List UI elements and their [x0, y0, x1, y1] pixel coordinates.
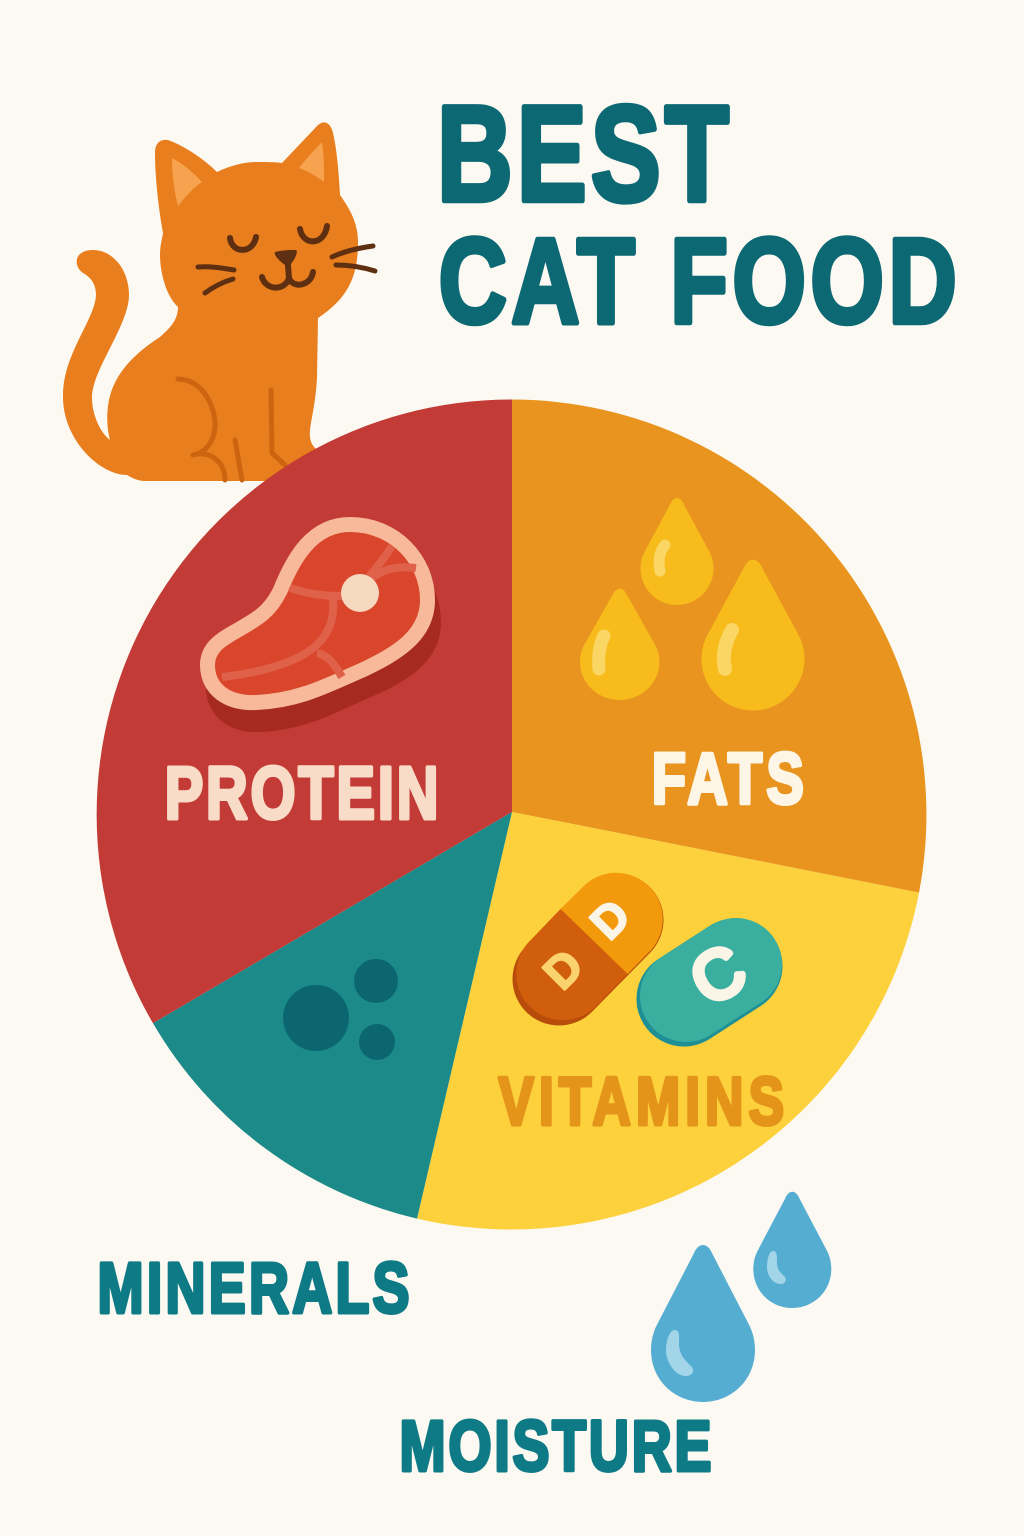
icon: vitamin D capsule — [516, 873, 663, 1020]
label: protein: PROTEIN — [165, 753, 438, 835]
slice: protein — [97, 399, 512, 1023]
title: CAT FOOD — [439, 213, 957, 348]
label: moisture: MOISTURE — [400, 1407, 711, 1486]
icon: sleeping orange cat — [63, 122, 375, 481]
label: fats: FATS — [652, 739, 804, 819]
slice: fats — [512, 400, 926, 893]
slice: minerals — [153, 812, 512, 1219]
title: BEST — [437, 77, 729, 230]
pie chart — [97, 399, 926, 1229]
icon: vitamin D capsule: D — [580, 889, 640, 949]
icon: vitamin C capsule: C — [678, 930, 758, 1020]
icon: water drops — [651, 1192, 831, 1402]
icon: oil drops — [580, 498, 804, 710]
icon: vitamin D capsule: D — [533, 939, 593, 999]
label: vitamins: VITAMINS — [498, 1063, 784, 1139]
slice: vitamins — [417, 812, 919, 1229]
label: minerals: MINERALS — [98, 1249, 409, 1328]
icon: mineral dots — [283, 959, 398, 1060]
title — [437, 77, 957, 348]
icon: steak — [206, 524, 441, 732]
